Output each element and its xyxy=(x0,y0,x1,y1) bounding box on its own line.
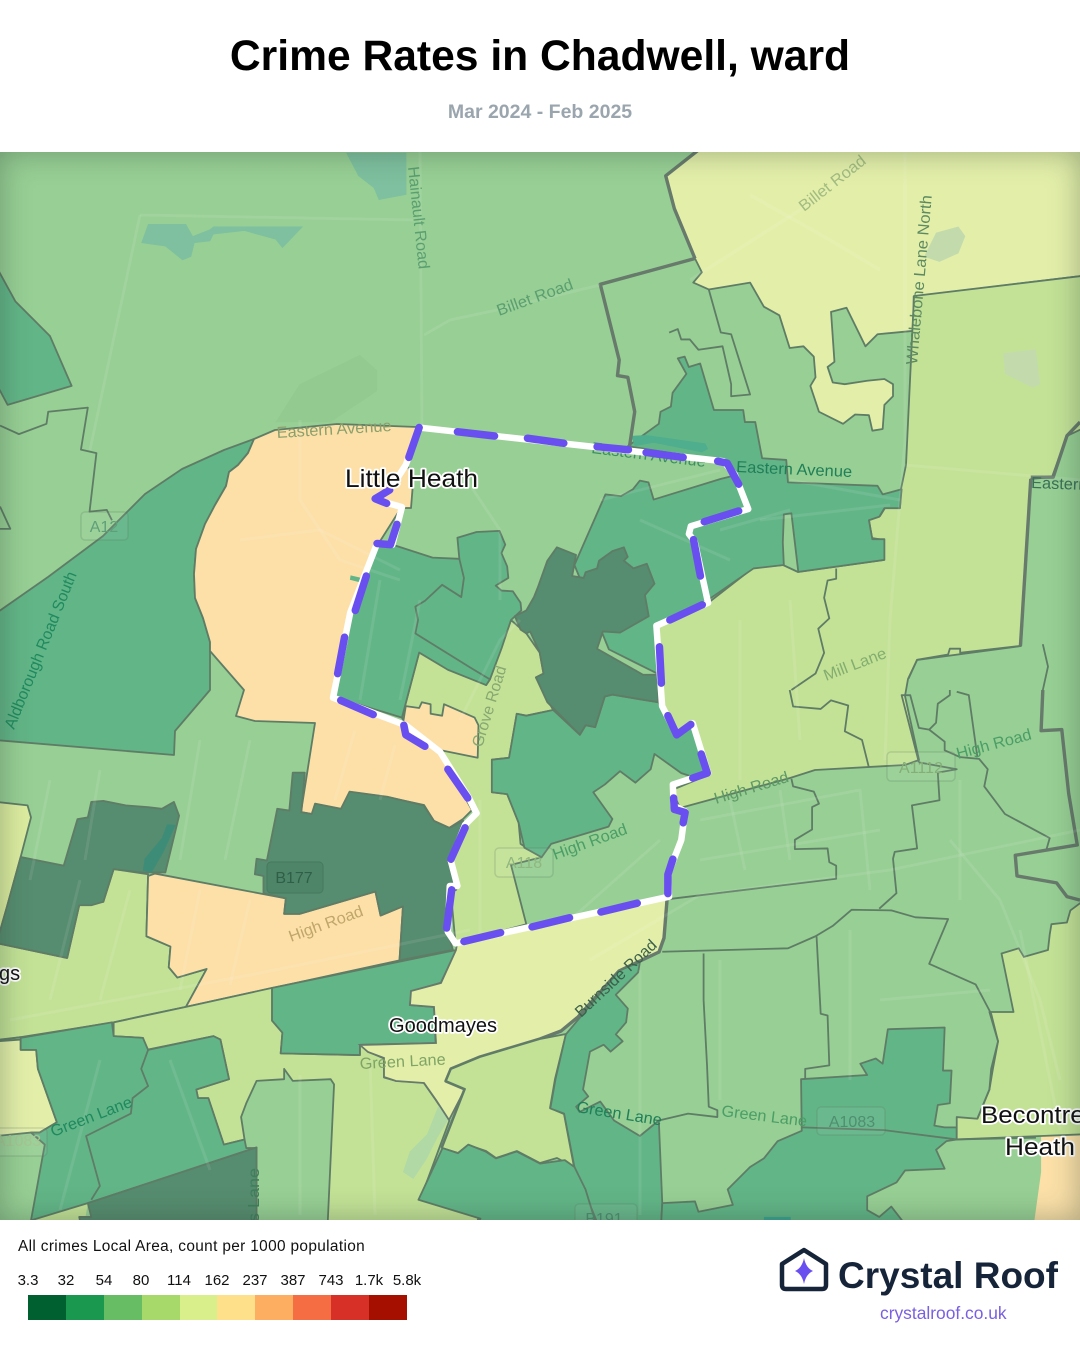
area: lower dark block xyxy=(418,1145,599,1234)
area: cream block inside ward xyxy=(403,702,478,758)
area: lime south of High Road xyxy=(114,988,479,1234)
road labels xyxy=(2,153,1080,1222)
area: lower centre dark block xyxy=(492,695,708,857)
road labels: Green Lane xyxy=(721,1103,808,1130)
icon: house with star xyxy=(780,1248,828,1292)
legend: 237 xyxy=(242,1272,268,1289)
area: Green Lane dark blocks xyxy=(21,1022,257,1220)
road labels: Hainault Road xyxy=(404,166,432,270)
road labels: High Road xyxy=(551,821,630,864)
area: pale yellow north-east xyxy=(666,150,1080,431)
area: Burnside dark band xyxy=(550,962,662,1234)
legend: 114 xyxy=(167,1272,191,1289)
logo wordmark: Crystal Roof xyxy=(838,1255,1058,1296)
area: pale yellow Goodmayes xyxy=(360,896,668,1120)
area: cream High Road block xyxy=(146,874,403,1007)
road labels: Whalebone Lane North xyxy=(904,195,936,365)
road labels: Eastern Avenue xyxy=(736,459,853,481)
area: lime south-west xyxy=(0,869,207,1041)
road shields: A118 xyxy=(506,855,542,872)
area: dark green north-east of ward xyxy=(574,357,902,673)
water bodies xyxy=(141,153,406,260)
legend: 80 xyxy=(133,1272,149,1289)
area: lime inside ward around Grove Road xyxy=(402,620,553,943)
legend: 743 xyxy=(318,1272,344,1289)
road labels: Green Lane xyxy=(575,1099,663,1129)
road shields: B177 xyxy=(275,870,313,887)
legend values xyxy=(18,1272,422,1289)
legend: 387 xyxy=(280,1272,306,1289)
place labels: Heath xyxy=(1005,1134,1075,1161)
logo url: crystalroof.co.uk xyxy=(880,1303,1007,1323)
road labels: High Road xyxy=(955,727,1033,763)
place labels: Little Heath xyxy=(345,465,478,493)
boundary lines xyxy=(0,258,1080,1139)
legend: 1.7k xyxy=(355,1272,383,1289)
road labels: Burnside Road xyxy=(572,937,661,1021)
roads xyxy=(10,150,1080,1215)
logo: Crystal Roof xyxy=(780,1248,1058,1323)
road labels: Green Lane xyxy=(48,1094,135,1141)
road labels: Billet Road xyxy=(495,276,576,320)
area: lime by the Burnside boundary xyxy=(442,1034,574,1167)
road shields: A12 xyxy=(90,519,118,536)
area: cream large west of ward xyxy=(194,424,472,828)
area: lime east of lower wards xyxy=(957,900,1080,1139)
area: darkest left block xyxy=(0,801,179,958)
road shields: A1112 xyxy=(899,760,943,777)
road labels: Green Lane xyxy=(359,1052,446,1073)
road labels: Grove Road xyxy=(470,664,510,749)
road labels: Aldborough Road South xyxy=(2,569,81,731)
place labels: Goodmayes xyxy=(389,1015,497,1037)
road labels: Billet Road xyxy=(796,153,870,215)
ward boundary: white line xyxy=(333,428,748,943)
legend: 3.3 xyxy=(18,1272,38,1289)
area: darkest centre block xyxy=(515,547,658,735)
legend colour scale xyxy=(28,1295,407,1320)
area: darkest bottom-left block xyxy=(79,1147,257,1234)
legend: 32 xyxy=(58,1272,74,1289)
ward boundary: purple dashes xyxy=(338,428,739,941)
legend title: All crimes Local Area, count per 1000 population xyxy=(18,1238,365,1255)
area: pale bottom-left xyxy=(0,1040,57,1136)
legend: 5.8k xyxy=(393,1272,421,1289)
road labels: Eastern Avenue xyxy=(276,418,392,442)
road labels: High Road xyxy=(287,903,366,946)
area: darkest south block xyxy=(255,773,463,960)
area: dark south of High Road xyxy=(272,950,456,1055)
area: south-east dark block xyxy=(661,1028,957,1234)
legend: 54 xyxy=(96,1272,112,1289)
road labels: Eastern Avenue xyxy=(591,440,707,471)
choropleth map xyxy=(0,152,1080,1220)
road shields xyxy=(0,512,955,1232)
legend: 162 xyxy=(204,1272,230,1289)
legend xyxy=(18,1238,422,1320)
area: left dark green Aldborough xyxy=(0,439,254,755)
pond south xyxy=(403,1090,461,1179)
area: cream south-east corner xyxy=(1032,1131,1080,1234)
title: Crime Rates in Chadwell, ward xyxy=(230,32,850,80)
area: pale lime far left xyxy=(0,802,31,943)
park water and ponds xyxy=(924,226,1040,388)
road shields: A1083 xyxy=(829,1114,875,1131)
subtitle: date range: Mar 2024 - Feb 2025 xyxy=(448,101,632,123)
area: lime east xyxy=(658,275,1080,808)
area: west dark block in ward xyxy=(333,531,521,718)
road labels: Mill Lane xyxy=(821,645,889,685)
road labels: High Road xyxy=(712,769,791,808)
place labels xyxy=(0,465,1080,1161)
